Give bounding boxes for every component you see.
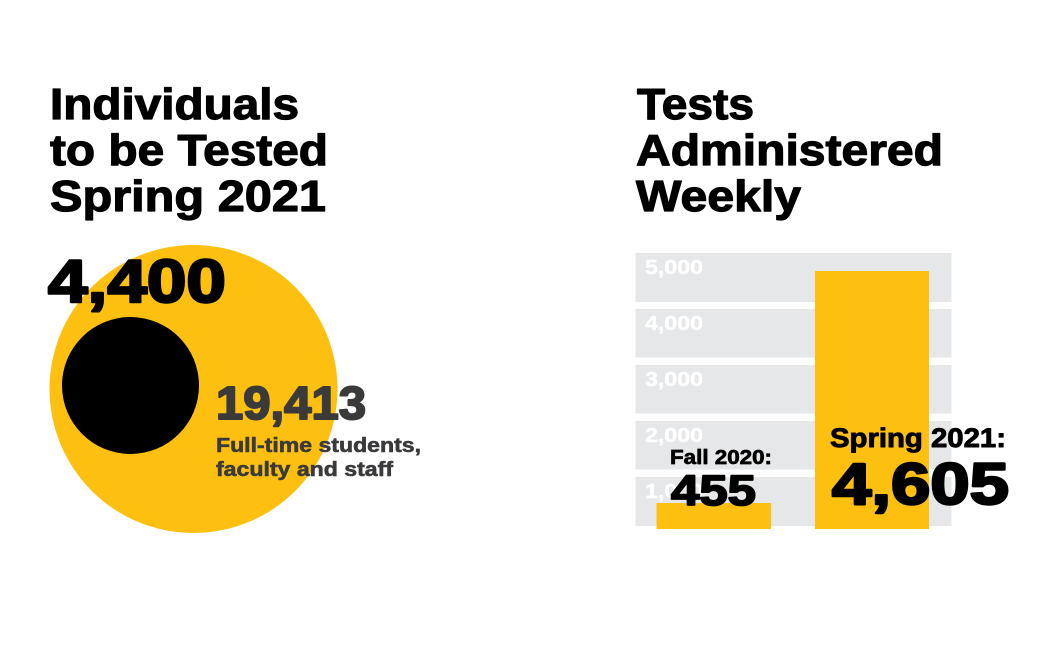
bar: fall 2020 — [656, 503, 771, 529]
axis labels: 5,000 — [645, 257, 703, 279]
axis labels: 1,000 — [645, 481, 703, 503]
axis labels — [645, 257, 703, 503]
small circle: individuals tested — [62, 317, 199, 454]
axis labels: 3,000 — [645, 369, 703, 391]
panel: tests administered weekly — [636, 80, 1009, 529]
large circle: total population — [50, 245, 338, 533]
label: fall 2020: Fall 2020: — [670, 447, 772, 469]
chart: nested circles — [50, 245, 338, 533]
chart background bands — [636, 253, 952, 526]
label: full-time students, faculty and staff — [216, 435, 421, 481]
label: spring 2021: Spring 2021: — [830, 423, 1006, 453]
axis labels: 2,000 — [645, 425, 703, 447]
heading: tests administered weekly: Administered — [636, 126, 943, 175]
number: 4,400: 4,400 — [48, 248, 226, 315]
number: 19,413: 19,413 — [216, 377, 366, 429]
bar: spring 2021 — [815, 271, 929, 529]
axis labels: 4,000 — [645, 313, 703, 335]
heading: tests administered weekly — [636, 80, 943, 221]
chart: weekly tests bar chart — [636, 253, 1009, 529]
heading: individuals to be tested: Spring 2021 — [50, 172, 326, 221]
heading: individuals to be tested: Individuals — [50, 80, 299, 129]
label: full-time students, faculty and staff: Full-time students, — [216, 435, 421, 457]
label: full-time students, faculty and staff: faculty and staff — [216, 459, 393, 481]
value: 4,605: 4,605 — [832, 452, 1009, 517]
heading: individuals to be tested — [50, 80, 328, 221]
heading: tests administered weekly: Tests — [637, 80, 754, 129]
heading: tests administered weekly: Weekly — [636, 172, 802, 221]
heading: individuals to be tested: to be Tested — [50, 126, 328, 175]
value: 455: 455 — [671, 467, 756, 515]
panel: individuals to be tested — [48, 80, 421, 533]
